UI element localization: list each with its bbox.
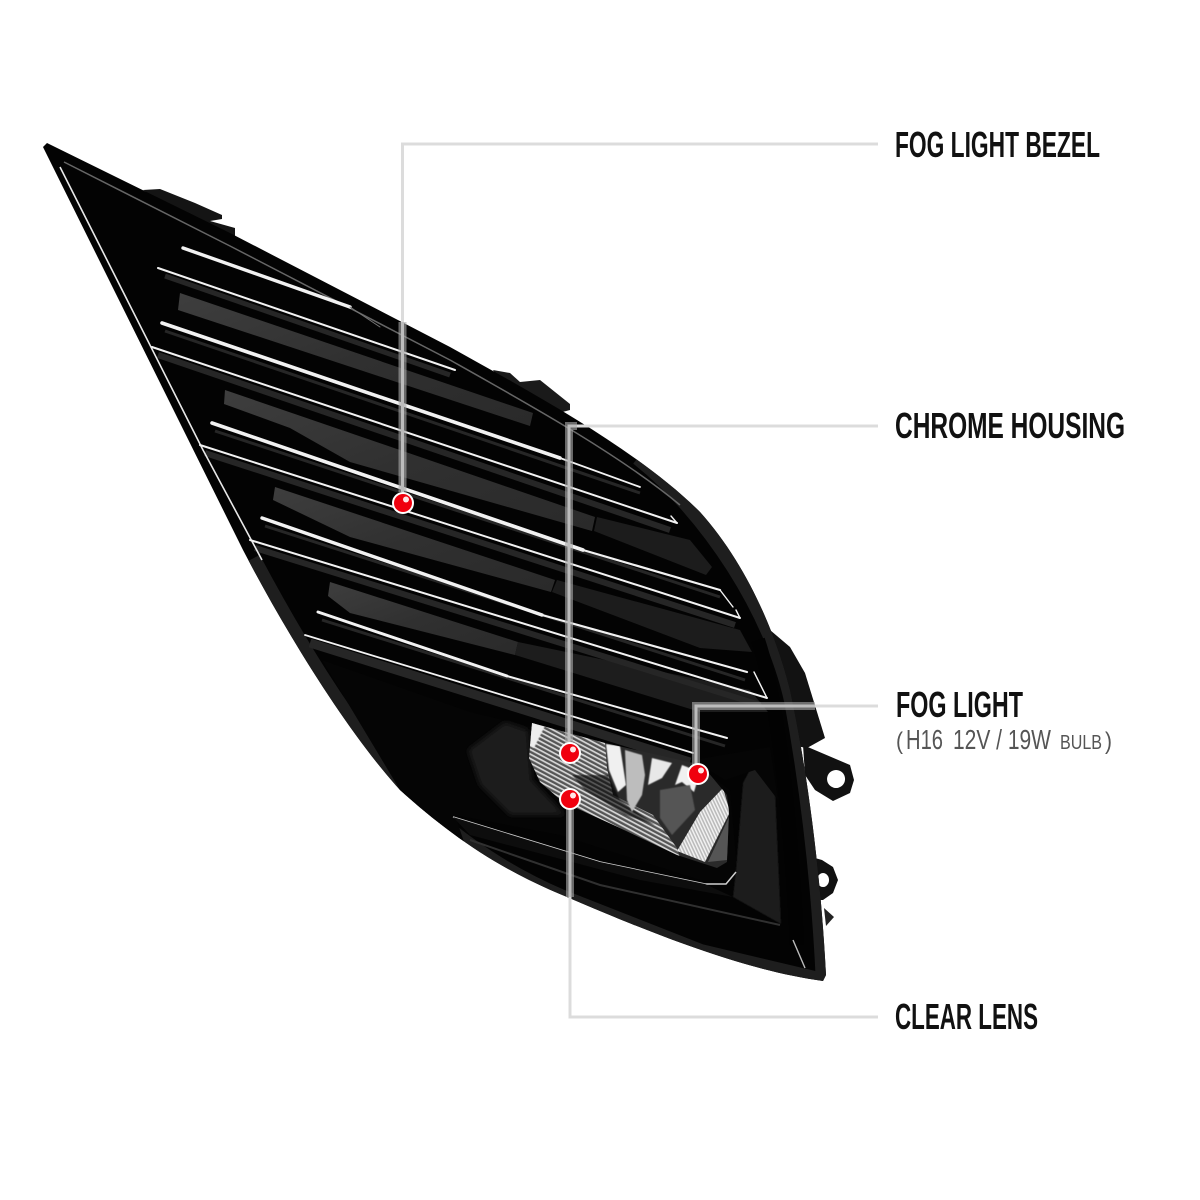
lower lips under chrome lines [158,276,760,762]
leader: fog light [696,706,878,765]
fluted lens ring [525,720,680,858]
dark slat continuation 1 [594,517,712,575]
corner glint [793,940,805,968]
mounting clip upper centre [493,370,570,414]
clear lens with chrome reflector [529,723,729,868]
frame side panel [733,760,781,924]
leader: fog light bezel [402,144,878,492]
lamp housing shadow detail [468,722,565,815]
leader: clear lens [570,808,878,1017]
grey slat band 3 [273,487,555,592]
grey slat band 4 [328,582,518,655]
lower mounting tab [815,858,838,900]
louver and rim detail [60,162,827,985]
lower frame highlight [453,817,736,884]
callout marker: chrome housing [559,742,581,764]
label: bulb specification [896,724,1112,755]
upper rim highlight [64,162,680,505]
label: clear lens: CLEAR LENS [895,996,1038,1037]
mounting clip upper left [143,189,235,240]
chrome highlight 2 [648,758,672,785]
chrome highlight 1 [606,744,626,792]
callout marker: fog light [687,763,709,785]
chrome slat highlights [152,248,767,753]
label: fog light: FOG LIGHT [896,684,1023,725]
chrome grey reflector [625,750,645,812]
leader: chrome housing [569,426,878,745]
label: bulb specification: 12V / 19W [953,724,1051,755]
leader halo over dark areas [402,322,815,897]
callout marker: clear lens [559,788,581,810]
inner black rim strip [763,638,770,654]
reflector dark base [534,726,729,868]
mounting tab with hole [803,745,854,801]
grey slat band 2 [224,390,595,531]
label: bulb specification: ) [1105,728,1112,755]
chrome mid tone [660,785,695,835]
callout marker: bezel [392,492,414,514]
dark slat continuation 2 [552,580,752,652]
outer glossy rim [250,455,827,985]
label: bulb specification: BULB [1060,732,1102,754]
fog light bezel assembly [43,143,854,985]
chrome highlight 3 [675,765,700,792]
grey slat band 1 [178,293,533,426]
label: bulb specification: H16 [906,724,943,755]
infographic canvas [43,132,1124,1030]
top-left lens glare [530,723,546,748]
lower frame fill [453,817,733,897]
lens dark band [572,775,655,825]
lower right lens tone [708,815,730,862]
rear connector right [770,630,825,748]
lens pocket shadow [348,704,464,842]
rim white highlight [60,167,262,560]
label: bulb specification: ( [896,728,903,755]
fluted bright lens right [677,788,730,862]
bezel silhouette [43,143,826,981]
small rear fin [824,908,834,926]
callout leader lines [402,144,878,1017]
dark slat continuation 3 [515,642,768,712]
frame top-right black corner [749,761,776,796]
